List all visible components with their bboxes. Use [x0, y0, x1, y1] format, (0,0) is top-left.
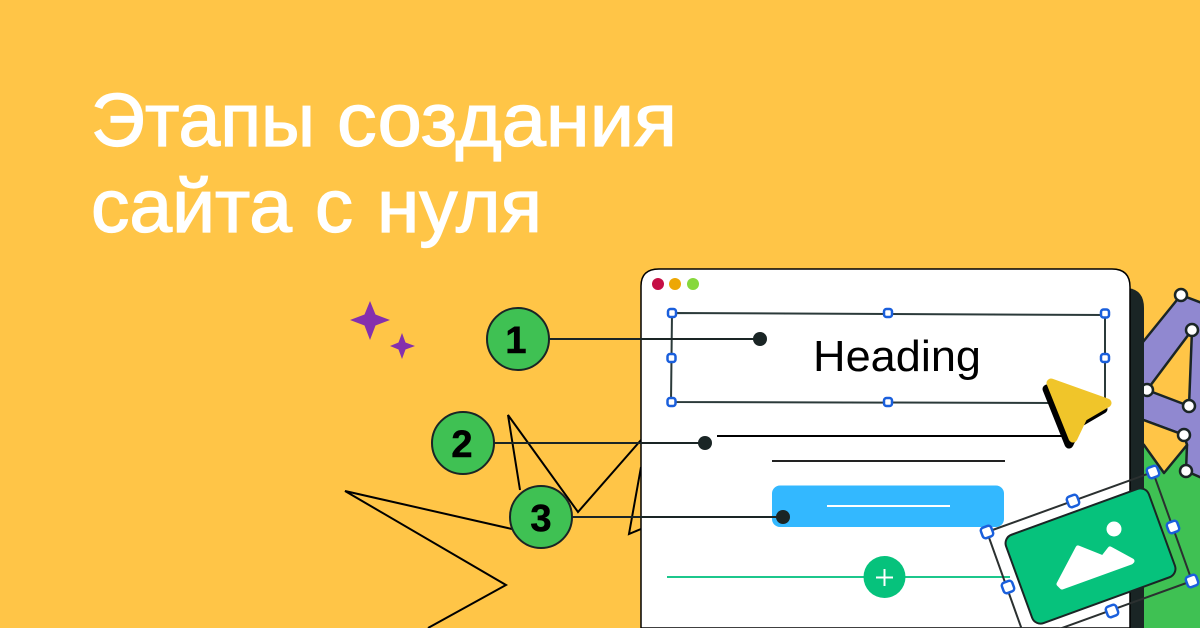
heading text: Heading [813, 332, 981, 381]
callout 2: 2 [451, 424, 473, 466]
title: Этапы [91, 78, 315, 162]
heading selection frame [668, 309, 1109, 406]
selection handles [980, 465, 1199, 618]
icon: purple sparkles [350, 301, 415, 359]
callout 1: 1 [505, 320, 527, 362]
background shapes right [1130, 289, 1200, 628]
icon: cursor arrow [1047, 383, 1107, 444]
title: с [315, 164, 353, 248]
title [91, 78, 677, 248]
callout 3: 3 [530, 498, 552, 540]
blue button [772, 486, 1004, 527]
image placeholder [980, 465, 1199, 628]
callout 2 [432, 412, 712, 474]
title: сайта [91, 164, 292, 248]
callout 3 [510, 486, 790, 548]
text placeholder lines [717, 436, 1062, 461]
title: создания [337, 78, 677, 162]
callout 1 [487, 308, 767, 370]
add section divider [667, 556, 1010, 598]
browser window shadow [1120, 288, 1144, 628]
icon: mountains [1059, 522, 1132, 587]
browser window [641, 269, 1130, 628]
title: нуля [377, 164, 542, 248]
window control dots [652, 278, 699, 290]
decorative star outline [345, 415, 641, 628]
